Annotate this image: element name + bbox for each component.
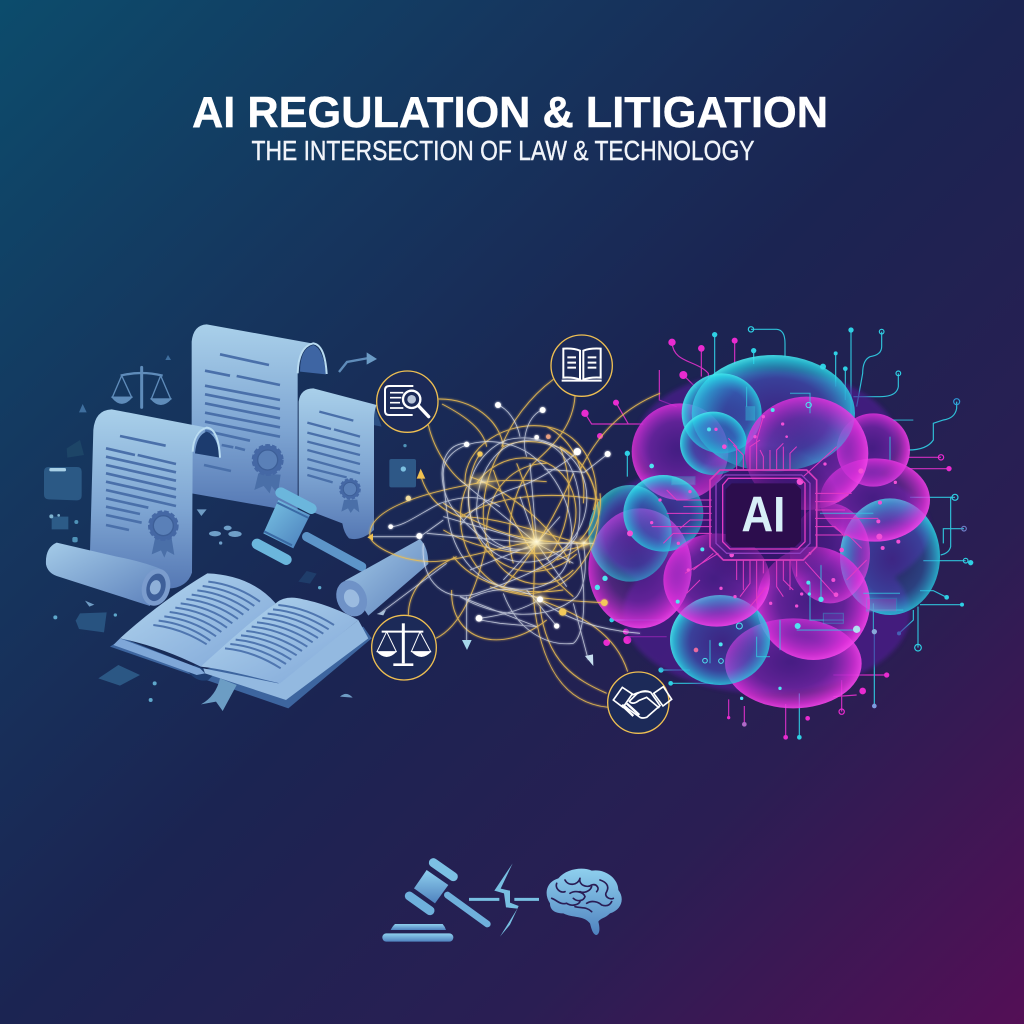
right small roll: [330, 539, 428, 621]
network nodes: [388, 402, 611, 629]
seal: [253, 445, 282, 495]
network arrowheads: [367, 469, 593, 666]
page block: [203, 620, 368, 700]
internal nodes: [627, 415, 900, 652]
cloud base silhouette: [597, 370, 930, 693]
tangled network: [367, 335, 672, 733]
central AI chip: [710, 470, 817, 560]
icon: faded scales: [112, 367, 171, 407]
icon badge: handshake: [608, 672, 672, 733]
internal cyan circuitry: [672, 387, 913, 663]
bottom roll: [46, 543, 174, 609]
open book: [110, 573, 372, 711]
ring nodes: [748, 327, 968, 714]
front scroll: [46, 409, 220, 609]
bright center glow: [465, 471, 595, 608]
AI brain cloud: [581, 327, 973, 740]
icon: gavel on block: [382, 863, 487, 942]
chip outer traces: [710, 470, 817, 560]
icon badge: scales of justice: [372, 615, 436, 680]
icon: brain: [547, 869, 622, 935]
icon: small arrow: [339, 352, 377, 372]
left page text lines: [153, 582, 260, 644]
cyan nodes: [609, 327, 973, 740]
cloud blobs: [588, 355, 940, 708]
seal: [149, 512, 177, 558]
right page: [201, 598, 358, 683]
left page: [120, 573, 276, 667]
bottom gavel and brain icon: [382, 863, 622, 942]
legal documents illustration: [44, 324, 428, 711]
internal cyan nodes: [595, 402, 877, 700]
text lines: [106, 436, 176, 530]
right scroll: [299, 388, 382, 539]
icon: split connector: [469, 863, 539, 937]
gold connection curves: [370, 379, 660, 707]
internal circuitry: [652, 417, 878, 607]
outer circuit nodes: [581, 338, 952, 740]
outer circuit traces magenta: [585, 341, 949, 737]
title: AI REGULATION & LITIGATION: [192, 88, 828, 137]
icon badge: document search: [377, 371, 438, 432]
outer circuit traces cyan: [612, 329, 966, 737]
right page text lines: [225, 605, 334, 668]
white connection curves: [370, 405, 640, 660]
icon badge: open book: [551, 335, 612, 396]
background debris icons: [44, 355, 416, 702]
seal: [340, 479, 360, 513]
book cover: [110, 627, 372, 708]
back scroll: [192, 324, 327, 512]
subtitle: THE INTERSECTION OF LAW & TECHNOLOGY: [252, 135, 755, 166]
AI label: AI: [741, 487, 785, 543]
text lines: [204, 354, 280, 471]
chip face: [726, 483, 801, 547]
text lines: [307, 412, 360, 482]
gavel: [257, 493, 362, 567]
